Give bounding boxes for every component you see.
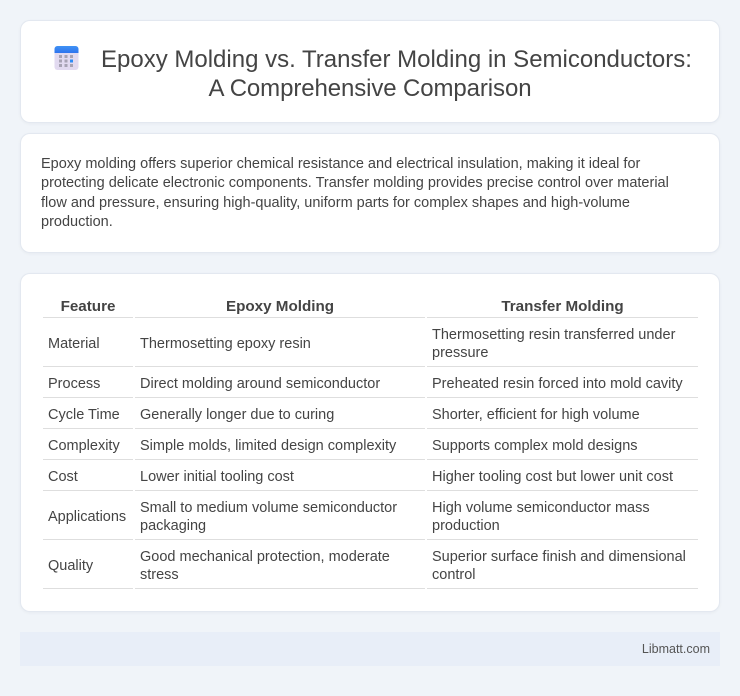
row: Quality: Superior surface finish and dimensional [432, 549, 686, 565]
row: Applications: production [432, 518, 500, 534]
row: Material: Thermosetting epoxy resin [140, 336, 311, 352]
row: Complexity: Simple molds, limited design complexity [140, 438, 396, 454]
text block: summary: protecting delicate electronic components. Transfer molding provides precise control over material [41, 175, 669, 191]
row: Quality: Good mechanical protection, moderate [140, 549, 390, 565]
row: Cycle Time: Cycle Time [48, 407, 120, 423]
row: Material: Thermosetting resin transferred under [432, 327, 675, 343]
header: Epoxy Molding: Epoxy Molding [226, 298, 334, 315]
row: Cycle Time [48, 407, 640, 423]
row: Complexity: Complexity [48, 438, 120, 454]
row: Quality [48, 549, 686, 583]
row: Complexity: Supports complex mold designs [432, 438, 638, 454]
row: Cost [48, 469, 673, 485]
row: Material: pressure [432, 345, 488, 361]
icon: calendar grid [54, 46, 78, 70]
row: Quality: stress [140, 567, 179, 583]
title [101, 46, 692, 102]
panel: title card [20, 20, 720, 123]
row: Quality: control [432, 567, 476, 583]
text block: summary: Epoxy molding offers superior chemical resistance and electrical insulation, making it ideal for [41, 156, 640, 172]
table header [61, 298, 624, 315]
row: Applications: packaging [140, 518, 206, 534]
row: Material [48, 327, 676, 361]
row: Process: Direct molding around semiconductor [140, 376, 380, 392]
text block: summary: production. [41, 214, 113, 230]
row: Cost: Lower initial tooling cost [140, 469, 294, 485]
header: Feature: Feature [61, 298, 115, 315]
footer credit: Libmatt.com [642, 642, 710, 656]
title: A Comprehensive Comparison [209, 74, 531, 102]
row: Applications [48, 500, 650, 534]
panel: introduction [20, 133, 720, 253]
footer [20, 632, 720, 666]
row: Process: Preheated resin forced into mold cavity [432, 376, 683, 392]
row: Cost: Higher tooling cost but lower unit cost [432, 469, 673, 485]
row: Applications: High volume semiconductor mass [432, 500, 650, 516]
row: Quality: Quality [48, 558, 93, 574]
row: Applications: Small to medium volume semiconductor [140, 500, 397, 516]
row: Material: Material [48, 336, 100, 352]
row: Process [48, 376, 683, 392]
header: Transfer Molding: Transfer Molding [501, 298, 624, 315]
row: Cost: Cost [48, 469, 78, 485]
row: Complexity [48, 438, 638, 454]
row: Cycle Time: Shorter, efficient for high volume [432, 407, 640, 423]
title: Epoxy Molding vs. Transfer Molding in Semiconductors: [101, 46, 692, 73]
text block: summary: flow and pressure, ensuring high-quality, uniform parts for complex shapes and high-volume [41, 194, 630, 210]
row: Process: Process [48, 376, 100, 392]
text block: summary [41, 156, 669, 230]
row: Applications: Applications [48, 509, 126, 525]
row: Cycle Time: Generally longer due to curing [140, 407, 334, 423]
panel: comparison table [20, 273, 720, 612]
